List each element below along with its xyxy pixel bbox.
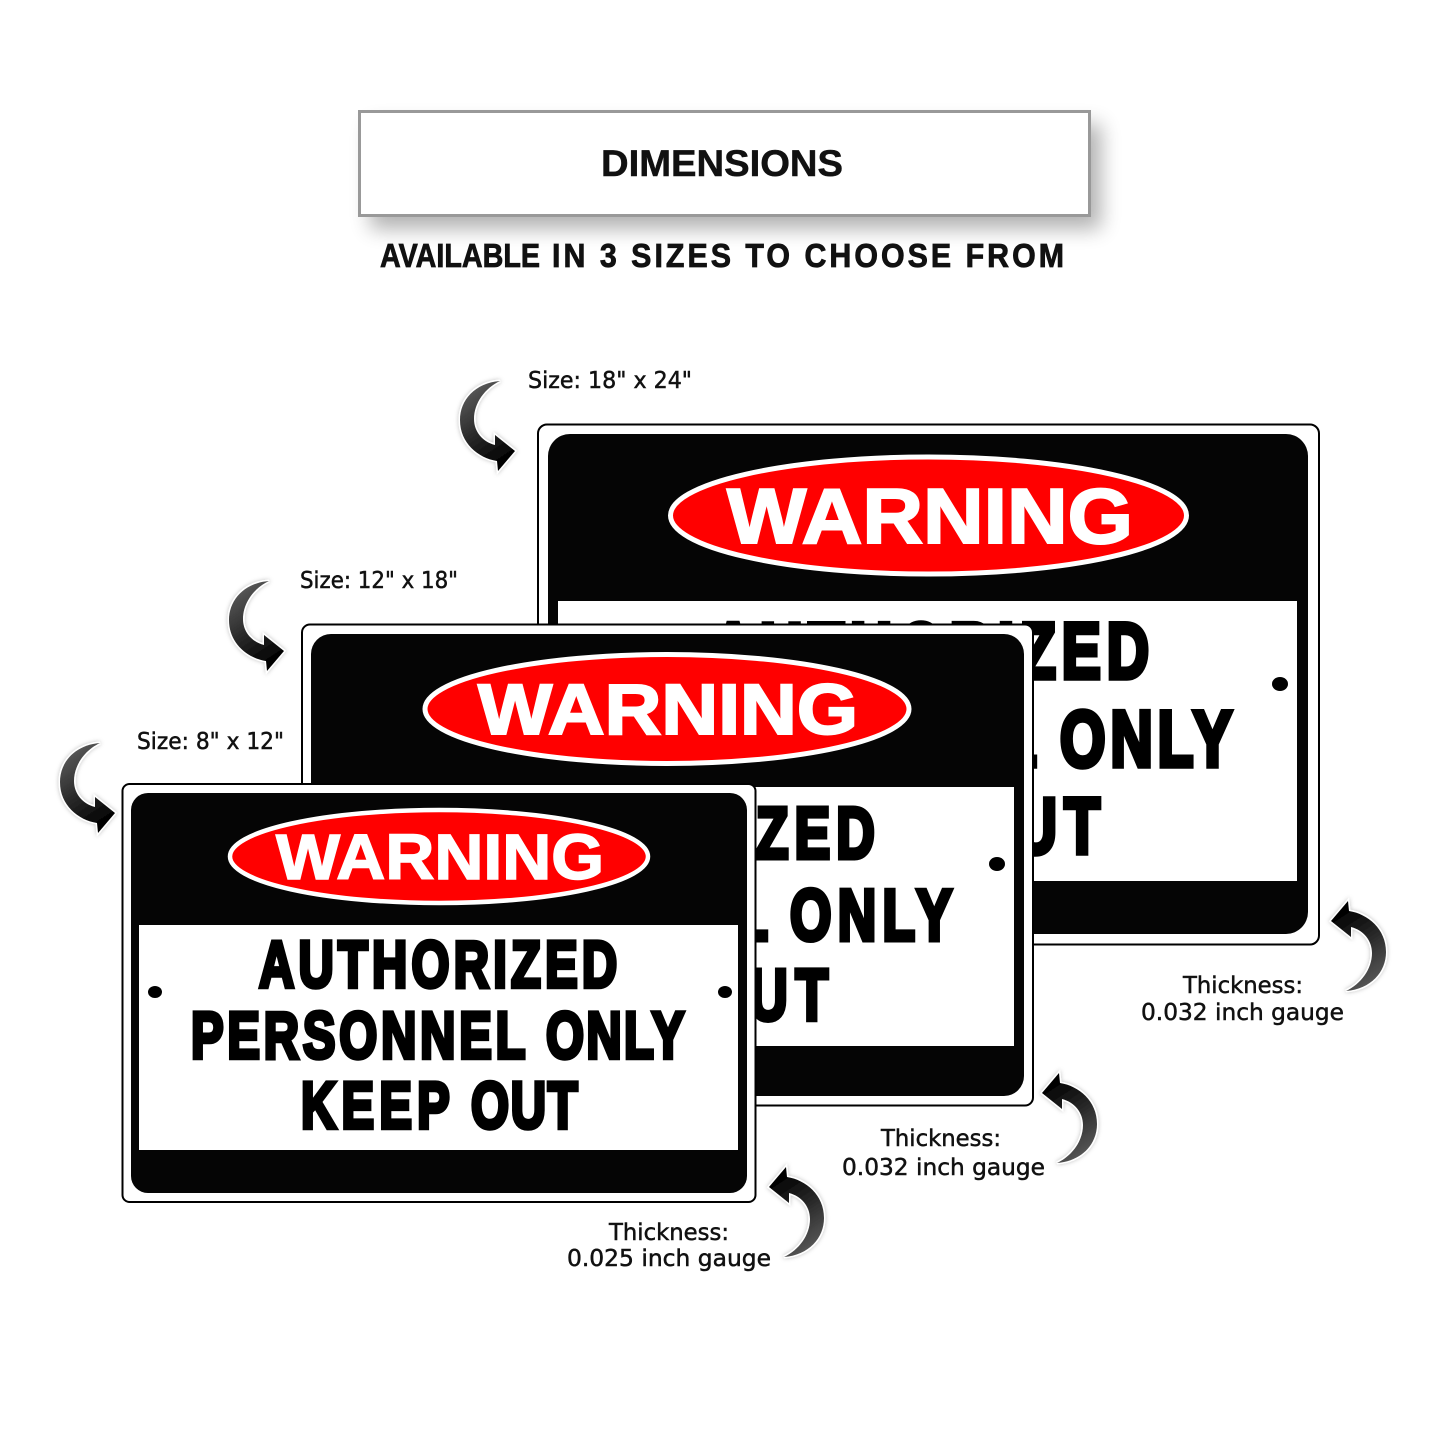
- subtitle: AVAILABLE: [380, 237, 540, 274]
- mounting hole: [1272, 677, 1288, 691]
- label: thickness small: Thickness:: [608, 1220, 729, 1246]
- sign message small: OUT: [471, 1069, 578, 1143]
- label: thickness medium: [842, 1126, 1045, 1181]
- label: thickness medium: Thickness:: [880, 1126, 1001, 1152]
- sign message large: KEEP: [766, 781, 940, 870]
- mounting hole left: [148, 986, 162, 998]
- label: thickness large: 0.032 inch gauge: [1141, 1000, 1344, 1026]
- label: thickness small: 0.025 inch gauge: [567, 1246, 771, 1272]
- label: thickness small: [567, 1220, 771, 1272]
- sign message medium: PERSONNEL: [385, 876, 768, 956]
- label: thickness large: [1141, 973, 1344, 1026]
- label: size 12 x 18: Size: 12" x 18": [300, 568, 458, 594]
- mounting hole right: [718, 986, 732, 998]
- warning oval small: WARNING: [276, 821, 604, 893]
- warning oval large: [670, 457, 1186, 574]
- sign: 12 x 18: [302, 624, 1033, 1106]
- sign message medium: KEEP: [517, 956, 680, 1036]
- sign message small: ONLY: [546, 999, 684, 1073]
- sign message small: KEEP: [301, 1069, 450, 1143]
- sign message large: PERSONNEL: [623, 694, 1037, 783]
- sign message small: AUTHORIZED: [259, 928, 617, 1002]
- sign message small: [191, 928, 684, 1143]
- sign message medium: ONLY: [790, 876, 952, 956]
- warning oval medium: [425, 654, 909, 764]
- sign message large: AUTHORIZED: [712, 606, 1149, 695]
- warning oval small: [230, 810, 648, 903]
- arrow: 12 x 18 size: [229, 581, 284, 671]
- warning oval large: WARNING: [727, 472, 1133, 560]
- sign: 18 x 24: [538, 424, 1319, 944]
- sign: 8 x 12: [122, 784, 756, 1202]
- sign message medium: AUTHORIZED: [470, 794, 875, 874]
- sign message large: [623, 606, 1232, 870]
- arrow: thickness small: [769, 1167, 824, 1257]
- arrow: 8 x 12 size: [60, 743, 115, 833]
- sign message large: ONLY: [1060, 694, 1232, 783]
- title box: [360, 112, 1101, 229]
- label: size 18 x 24: Size: 18" x 24": [528, 368, 692, 394]
- sign message small: PERSONNEL: [191, 999, 525, 1073]
- label: thickness large: Thickness:: [1182, 973, 1303, 999]
- sign message large: OUT: [962, 781, 1100, 870]
- arrow: thickness medium: [1042, 1073, 1097, 1163]
- subtitle: IN 3 SIZES TO CHOOSE FROM: [552, 237, 1064, 274]
- arrow: 18 x 24 size: [460, 381, 515, 471]
- label: size 8 x 12: Size: 8" x 12": [137, 729, 284, 755]
- sign message medium: OUT: [700, 956, 828, 1036]
- label: thickness medium: 0.032 inch gauge: [842, 1155, 1045, 1181]
- sign message medium: [385, 794, 952, 1036]
- heading: dimensions: DIMENSIONS: [601, 143, 843, 184]
- mounting hole: [989, 857, 1005, 871]
- arrow: thickness large: [1331, 901, 1386, 991]
- warning oval medium: WARNING: [478, 671, 858, 750]
